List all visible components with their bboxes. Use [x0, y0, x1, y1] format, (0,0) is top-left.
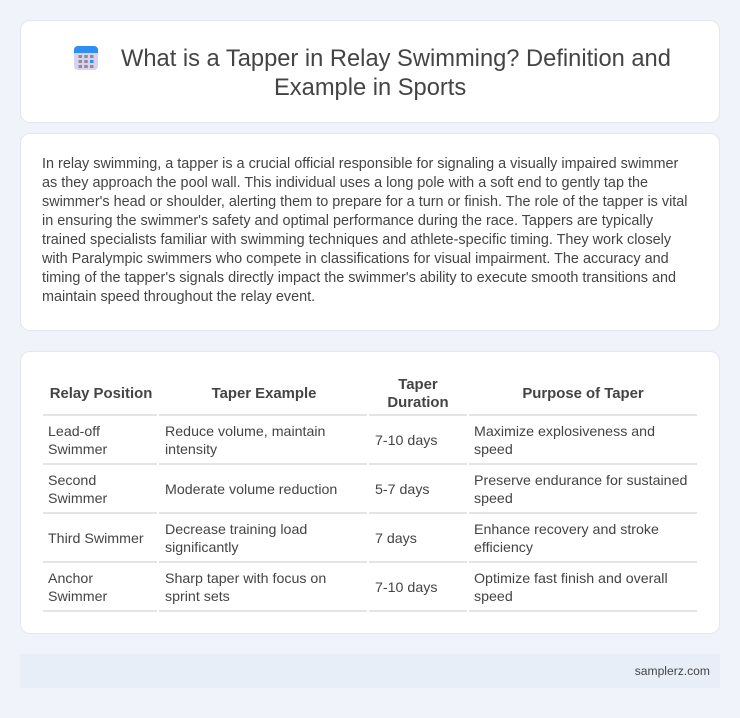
row: second swimmer: speed — [474, 491, 513, 507]
row: third swimmer — [48, 522, 659, 556]
panel: title card — [20, 20, 720, 123]
row: anchor swimmer: Optimize fast finish and overall — [474, 571, 668, 587]
panel: definition text: with Paralympic swimmers who compete in classifications for visual impairment. The accuracy and — [42, 251, 669, 267]
row: second swimmer — [48, 473, 687, 507]
row: lead-off swimmer — [48, 424, 655, 458]
panel: definition text — [20, 133, 720, 331]
row: lead-off swimmer: Swimmer — [48, 442, 107, 458]
panel: definition text: timing of the tapper's signals directly impact the swimmer's ability to execute smooth transitions and — [42, 270, 676, 286]
row: anchor swimmer: 7-10 days — [375, 580, 437, 596]
row: lead-off swimmer: speed — [474, 442, 513, 458]
panel: definition text: trained specialists familiar with swimming techniques and athlete-specific timing. They work closely — [42, 232, 671, 248]
footer source text: samplerz.com — [635, 664, 710, 678]
row: lead-off swimmer: intensity — [165, 442, 217, 458]
panel: definition text: as they approach the pool wall. This individual uses a long pole with a soft end to gently tap the — [42, 175, 648, 191]
row: third swimmer: Enhance recovery and stroke — [474, 522, 659, 538]
panel: definition text: In relay swimming, a tapper is a crucial official responsible for signaling a visually impaired swimmer — [42, 156, 678, 172]
panel: definition text: swimmer's head or shoulder, alerting them to prepare for a turn or finish. The role of the tapper is vital — [42, 194, 687, 210]
row: anchor swimmer: Swimmer — [48, 589, 107, 605]
row: third swimmer: Third Swimmer — [48, 531, 144, 547]
table header: Relay Position — [50, 386, 152, 402]
row: second swimmer: Swimmer — [48, 491, 107, 507]
table header: Taper Example — [212, 386, 316, 402]
row: third swimmer: significantly — [165, 540, 238, 556]
panel: definition text: maintain speed throughout the relay event. — [42, 289, 315, 305]
row: second swimmer: 5-7 days — [375, 482, 430, 498]
row: anchor swimmer: speed — [474, 589, 513, 605]
row: anchor swimmer: Anchor — [48, 571, 93, 587]
row: lead-off swimmer: Lead-off — [48, 424, 100, 440]
row: anchor swimmer: sprint sets — [165, 589, 230, 605]
footer bar — [20, 654, 720, 688]
table header: Duration — [387, 395, 449, 411]
row: second swimmer: Second — [48, 473, 96, 489]
row: lead-off swimmer: Maximize explosiveness and — [474, 424, 655, 440]
table header — [50, 377, 644, 411]
icon: calendar — [74, 46, 98, 70]
row: anchor swimmer: Sharp taper with focus on — [165, 571, 326, 587]
row: anchor swimmer — [48, 571, 668, 605]
row: third swimmer: efficiency — [474, 540, 533, 556]
panel: definition text: in ensuring the swimmer's safety and optimal performance during the race. Tappers are typically — [42, 213, 653, 229]
table header: Purpose of Taper — [522, 386, 644, 402]
title: Example in Sports — [274, 75, 466, 101]
table header: Taper — [398, 377, 438, 393]
panel: relay taper table — [20, 351, 720, 634]
row: lead-off swimmer: 7-10 days — [375, 433, 437, 449]
row: second swimmer: Moderate volume reduction — [165, 482, 337, 498]
row: second swimmer: Preserve endurance for sustained — [474, 473, 687, 489]
row: lead-off swimmer: Reduce volume, maintain — [165, 424, 325, 440]
row: third swimmer: Decrease training load — [165, 522, 307, 538]
title — [121, 46, 671, 101]
title: What is a Tapper in Relay Swimming? Definition and — [121, 46, 671, 72]
row: third swimmer: 7 days — [375, 531, 417, 547]
